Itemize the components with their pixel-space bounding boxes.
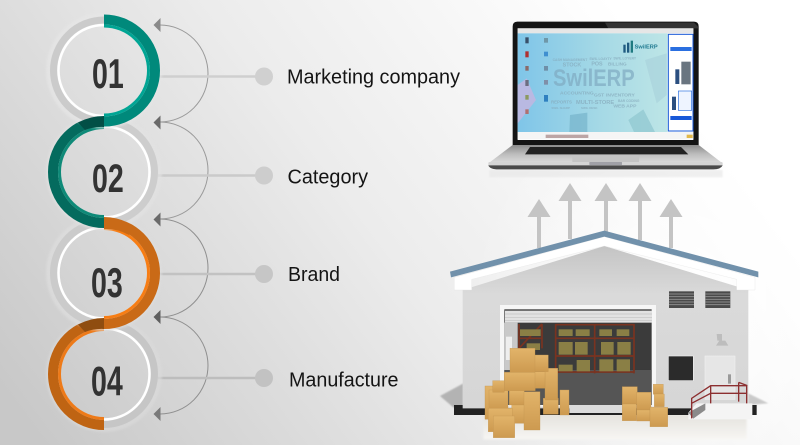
laptop screen: BILLING: [608, 61, 627, 66]
laptop screen: ACCOUNTING: [560, 91, 594, 97]
step 3 ring: [48, 218, 160, 328]
laptop screen: SWIL DESK: [581, 106, 598, 110]
step 2 number: 02: [92, 158, 124, 201]
ground shadows: [440, 383, 463, 407]
step 2 leader line: [158, 166, 273, 184]
keyboard: [525, 147, 688, 154]
window: [668, 356, 693, 381]
laptop screen: POS: [591, 61, 603, 67]
laptop screen: REPORTS: [551, 99, 572, 104]
trackpad: [572, 155, 639, 162]
laptop screen: SwilERP: [553, 65, 635, 92]
warehouse: [440, 231, 768, 439]
laptop screen: MULTI-STORE: [576, 100, 614, 106]
step 1 leader line: [158, 68, 273, 86]
step 2 ring: [48, 116, 160, 228]
side door: [705, 356, 735, 399]
step 4 number: 04: [91, 357, 123, 405]
plinth: [454, 405, 757, 415]
ring overlap: 1 to 2: [78, 116, 104, 130]
laptop screen: BAR CODING: [618, 99, 640, 103]
laptop base: [488, 145, 723, 169]
connector: arcs and arrowheads: [154, 18, 208, 421]
laptop screen: WEB APP: [613, 104, 637, 110]
step 1 ring: [48, 15, 160, 126]
wall: [463, 246, 748, 408]
label: Category: Category: [288, 166, 368, 188]
ring overlap: 3 to 4: [78, 318, 104, 332]
label: Brand: Brand: [288, 264, 340, 286]
step 4 ring: [48, 318, 160, 430]
laptop lid: [513, 22, 699, 145]
laptop screen: INVENTORY: [606, 93, 635, 99]
boxes: left pile: [485, 348, 569, 438]
step 3 number: 03: [91, 258, 123, 306]
upward arrows: [528, 183, 682, 248]
lamp: [716, 334, 728, 346]
laptop screen: SWIL SHARP: [551, 106, 570, 110]
laptop screen: SwilERP: [635, 44, 658, 50]
boxes: right pile: [622, 384, 668, 427]
floor: [483, 414, 747, 439]
laptop screen: [518, 28, 693, 140]
main door: [500, 305, 656, 413]
label: Marketing company: Marketing company: [287, 66, 460, 88]
ring overlap: 2 to 3: [104, 217, 134, 235]
step 1 number: 01: [92, 49, 124, 97]
laptop screen: SWIL LOYERY: [613, 57, 637, 61]
step 3 leader line: [158, 265, 273, 283]
roof: [450, 231, 758, 277]
laptop: [488, 22, 723, 177]
laptop screen: CASH MANAGEMENT: [553, 58, 587, 62]
fascia: [454, 237, 755, 290]
shelving: [519, 324, 634, 373]
label: Manufacture: Manufacture: [289, 370, 398, 392]
laptop screen: STOCK: [563, 63, 581, 69]
side vents: [669, 291, 730, 308]
laptop screen: GST: [594, 93, 604, 99]
laptop reflection: [489, 170, 723, 177]
entry steps and railing: [688, 382, 752, 419]
laptop screen: SWIL LOAYTY: [589, 57, 612, 61]
step 4 leader line: [158, 369, 273, 387]
